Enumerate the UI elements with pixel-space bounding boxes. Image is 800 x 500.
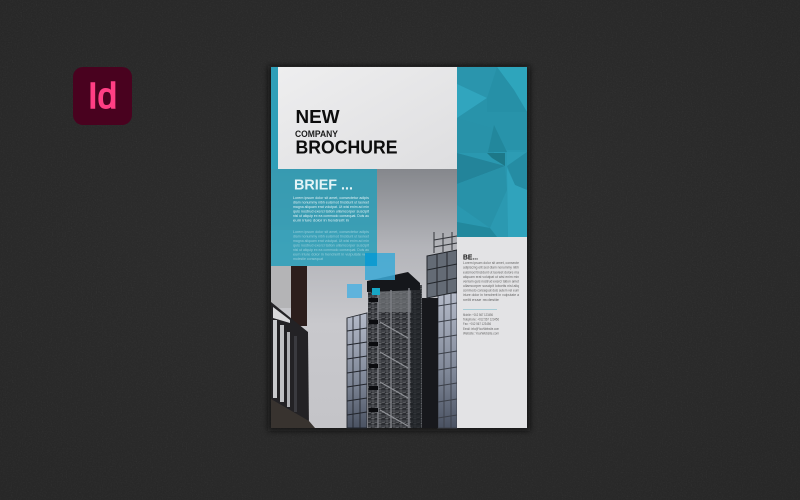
text block: contact details: Email: info@YourWebsite.com xyxy=(463,327,499,331)
text block: contact details: Telephone: +012 567 123456 xyxy=(463,318,499,322)
text block: brief paragraph two: eum iriure dolor in hendrerit in vulputate velit xyxy=(293,252,369,256)
dark side tower xyxy=(422,298,438,428)
left glass tower xyxy=(347,313,367,428)
subtitle: company: COMPANY xyxy=(295,129,338,139)
icon: InDesign logo xyxy=(73,67,132,125)
text block: brief paragraph one: nisl ut aliquip ex ea commodo consequat. Duis au xyxy=(293,214,369,218)
text block: brief paragraph one: Lorem ipsum dolor sit amet, consectetur adipis xyxy=(293,196,369,200)
text block: be paragraph: ullamcorper suscipit lobortis nisl aliq xyxy=(463,284,519,288)
icon: InDesign logo: Id xyxy=(88,75,117,116)
text block: contact details: Fax: +012 567 123456 xyxy=(463,322,491,326)
text block: contact details: Mobile: +012 567 123456 xyxy=(463,313,493,317)
text block: brief paragraph one xyxy=(293,196,369,222)
left foreground building xyxy=(271,266,315,428)
text block: brief paragraph two: Lorem ipsum dolor sit amet, consectetur adipis xyxy=(293,230,369,234)
text block: contact details xyxy=(463,313,499,336)
accent squares xyxy=(347,253,395,298)
brochure page xyxy=(271,67,527,428)
text block: brief paragraph two: quis nostrud exerci tation ullamcorper suscipit xyxy=(293,244,369,248)
text block: brief paragraph two: molestie consequat xyxy=(293,257,323,261)
text block: brief paragraph one: quis nostrud exerci tation ullamcorper suscipit xyxy=(293,210,369,214)
rooftop scaffold xyxy=(434,232,457,253)
text block: be paragraph: veniam quis nostrud exerci tation amet xyxy=(463,279,519,283)
divider xyxy=(463,308,497,311)
text block: brief paragraph one: diam nonummy nibh euismod tincidunt ut laoreet xyxy=(293,200,369,204)
text block: be paragraph xyxy=(463,261,519,302)
text block: be paragraph: adipiscing elit sed diam nonummy nibh xyxy=(463,266,519,270)
title: new: NEW xyxy=(296,106,340,127)
text block: be paragraph: iriure dolor in hendrerit in vulputate a xyxy=(463,293,519,297)
central steel tower xyxy=(367,272,422,428)
text block: be paragraph: aliquam erat volutpat ut wisi enim min xyxy=(463,275,519,279)
text block: be paragraph: commodo consequat duis autem vel eum xyxy=(463,289,519,293)
text block: brief paragraph two: diam nonummy nibh euismod tincidunt ut laoreet xyxy=(293,234,369,238)
glass billboard panel xyxy=(427,250,457,298)
heading: be: BE... xyxy=(463,252,478,262)
text block: be paragraph: velit esse molestie xyxy=(463,298,499,302)
text block: contact details: Website: YourWebsite.com xyxy=(463,332,499,336)
panel: brief teal overlay xyxy=(271,169,377,266)
text block: brief paragraph two: nisl ut aliquip ex ea commodo consequat. Duis au xyxy=(293,248,369,252)
right glass tower xyxy=(438,293,457,428)
panel: title block xyxy=(271,67,457,169)
text block: brief paragraph two: magna aliquam erat volutpat. Ut wisi enim ad min xyxy=(293,239,369,243)
text block: be paragraph: euismod tincidunt ut laoreet dolore ma xyxy=(463,270,519,274)
page shadow xyxy=(268,66,530,431)
text block: brief paragraph one: magna aliquam erat volutpat. Ut wisi enim ad min xyxy=(293,205,369,209)
title: brochure: BROCHURE xyxy=(296,136,398,158)
text block: brief paragraph one: eum iriure dolor in hendrerit in xyxy=(293,218,349,222)
text block: brief paragraph two xyxy=(293,230,369,261)
panel: photo of skyscraper xyxy=(271,169,457,428)
panel: teal polygon pattern xyxy=(457,67,527,237)
panel: be text column xyxy=(457,237,527,428)
heading: brief: BRIEF ... xyxy=(294,176,353,194)
text block: be paragraph: Lorem ipsum dolor sit amet, consecte xyxy=(463,261,519,265)
